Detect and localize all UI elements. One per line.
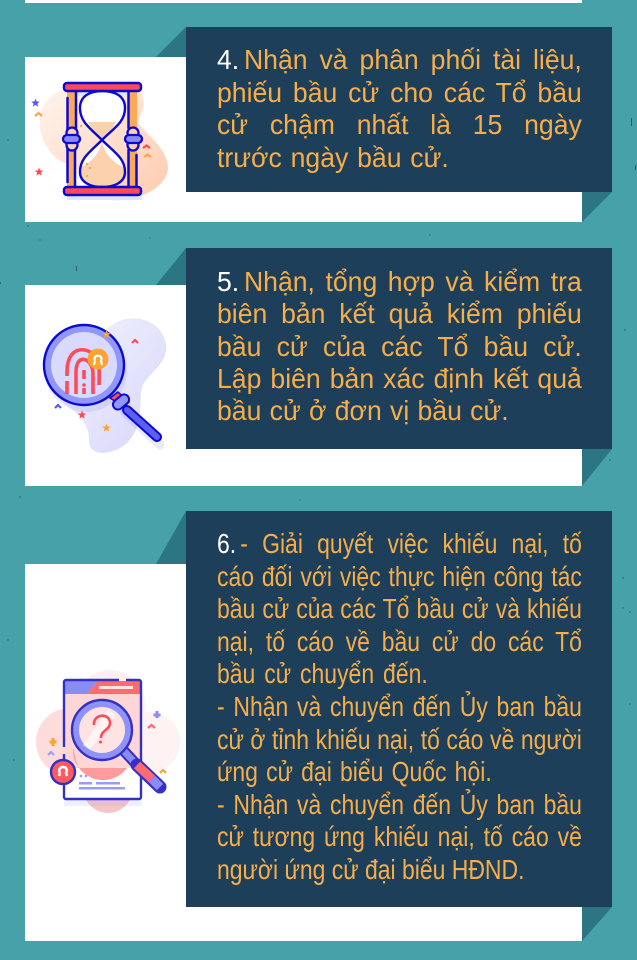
text: step 4: 4.Nhận và phân phối tài liệu, (217, 44, 582, 75)
text: step 6: bầu cử chuyển đến. (217, 658, 428, 689)
icon: document with question magnifier (36, 670, 180, 813)
text: step 6: người ứng cử đại biểu HĐND. (217, 854, 524, 885)
text: step 4: phiếu bầu cử cho các Tổ bầu (217, 76, 582, 108)
text: step 5: Lập biên bản xác định kết quả (217, 363, 582, 394)
white card 5 (25, 285, 582, 486)
text: step 4 (217, 44, 582, 173)
white card 6 (25, 564, 582, 941)
fold corners 4 (156, 27, 612, 222)
text: step 6: - Nhận và chuyển đến Ủy ban bầu (217, 691, 582, 722)
text: step 5: bầu cử của các Tổ bầu cử. (217, 331, 582, 362)
white card 4 (25, 57, 582, 222)
text: step 6: ứng cử đại biểu Quốc hội. (217, 756, 492, 787)
panel: step 6 (25, 511, 612, 941)
panel: step 4 (25, 27, 612, 222)
text: step 5: 5.Nhận, tổng hợp và kiểm tra (217, 266, 582, 297)
dark text box 5 (186, 248, 612, 449)
icon: magnifier with fingerprint (42, 318, 166, 453)
text: step 6: nại, tố cáo về bầu cử do các Tổ (217, 626, 582, 657)
icon: hourglass (31, 82, 168, 200)
text: step 6 (217, 528, 582, 885)
text: step 5: biên bản kết quả kiểm phiếu (217, 298, 582, 329)
fold corners 6 (156, 511, 612, 941)
text: step 6: cáo đối với việc thực hiện công tác (217, 561, 582, 592)
panel: step 5 (25, 248, 612, 486)
text: step 6: - Nhận và chuyển đến Ủy ban bầu (217, 789, 582, 820)
fold corners 5 (156, 248, 612, 486)
text: step 5: bầu cử ở đơn vị bầu cử. (217, 395, 509, 426)
text: step 4: cử chậm nhất là 15 ngày (217, 109, 582, 140)
text: step 6: bầu cử của các Tổ bầu cử và khiếu (217, 593, 582, 624)
top white card remnant (25, 0, 582, 3)
dark text box 4 (186, 27, 612, 192)
dark text box 6 (186, 511, 612, 907)
text: step 5 (217, 266, 582, 426)
text: step 6: cử tương ứng khiếu nại, tố cáo về (217, 821, 582, 852)
text: step 4: trước ngày bầu cử. (217, 142, 449, 172)
text: step 6: 6.- Giải quyết việc khiếu nại, tố (217, 528, 582, 559)
text: step 6: cử ở tỉnh khiếu nại, tố cáo về người (217, 724, 582, 755)
